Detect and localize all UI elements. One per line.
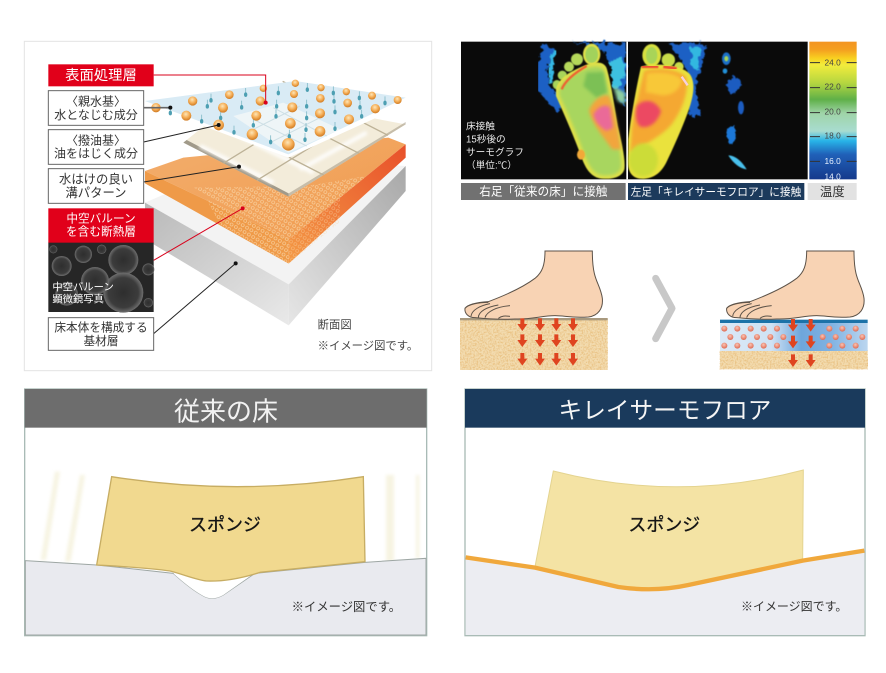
thermograph note: 15秒後の	[466, 133, 506, 145]
panel: thermograph	[461, 42, 857, 200]
header: Kirei Thermo floor	[465, 389, 865, 428]
temperature colour scale	[809, 42, 857, 181]
micrograph of hollow balloons	[48, 243, 154, 313]
label: insulation layer: 中空バルーン	[66, 212, 136, 226]
caption: left foot	[628, 183, 804, 200]
temperature colour scale: 22.0	[825, 81, 841, 91]
label: surface treatment layer	[48, 64, 154, 86]
header: conventional floor: 従来の床	[174, 396, 278, 426]
label: groove pattern	[48, 169, 144, 203]
label: insulation layer	[48, 208, 154, 243]
label: base material: 床本体を構成する	[54, 321, 148, 335]
caption: temperature	[808, 183, 857, 200]
caption: cross-section note: ※イメージ図です。	[318, 340, 418, 353]
temperature colour scale: 24.0	[825, 57, 841, 67]
label: hydrophilic group: 〈親水基〉	[66, 94, 126, 108]
panel: layered floor cross-section	[24, 41, 432, 371]
diagram: conventional floor	[460, 251, 608, 370]
sponge label: スポンジ	[189, 515, 261, 535]
image note: ※イメージ図です。	[741, 599, 847, 613]
caption: right foot: 右足「従来の床」に接触	[479, 185, 608, 199]
temperature colour scale: 14.0	[825, 171, 841, 181]
label: base material	[48, 318, 154, 350]
label: groove pattern: 溝パターン	[65, 186, 127, 200]
caption: right foot	[461, 183, 626, 200]
orange insulation layer	[466, 551, 864, 589]
caption: cross-section note	[318, 319, 418, 353]
decorative pale stripes	[41, 472, 419, 562]
base material layer	[145, 156, 406, 325]
temperature colour scale: 18.0	[825, 131, 841, 141]
micrograph of hollow balloons: 中空バルーン	[52, 280, 114, 293]
arrow: comparison chevron	[656, 278, 672, 339]
label: oil-repellent group	[48, 130, 144, 164]
label: hydrophilic group: 水となじむ成分	[54, 108, 138, 122]
label: hydrophilic group	[48, 91, 144, 125]
label: oil-repellent group: 〈撥油基〉	[66, 132, 126, 147]
header: conventional floor	[25, 389, 427, 428]
thermograph note: （単位:℃）	[466, 160, 517, 172]
label: surface treatment layer: 表面処理層	[65, 67, 137, 84]
sponge	[97, 477, 365, 581]
panel: Kirei Thermo floor sponge test	[465, 389, 865, 636]
groove pattern layer	[183, 81, 406, 197]
micrograph of hollow balloons: 顕微鏡写真	[52, 293, 104, 306]
thermograph note: 床接触	[466, 120, 495, 132]
temperature colour scale: 16.0	[825, 156, 841, 166]
label: oil-repellent group: 油をはじく成分	[54, 147, 138, 161]
caption: cross-section note: 断面図	[318, 319, 352, 332]
label: insulation layer: を含む断熱層	[66, 226, 136, 239]
surface treatment sheet	[145, 80, 406, 158]
floor surface	[466, 551, 864, 635]
panel: conventional floor sponge test	[25, 389, 427, 636]
thermal image: left foot on Kirei Thermo floor	[628, 43, 747, 179]
image note: ※イメージ図です。	[292, 600, 401, 614]
label: base material: 基材層	[84, 334, 118, 348]
insulation layer with hollow balloons	[145, 138, 406, 264]
label: groove pattern: 水はけの良い	[59, 172, 133, 187]
thermograph note: サーモグラフ	[466, 146, 524, 158]
thermograph note	[466, 120, 524, 172]
sponge	[535, 470, 803, 589]
sponge label: スポンジ	[628, 515, 700, 535]
diagram: Kirei Thermo floor	[720, 251, 868, 369]
leader lines	[144, 75, 268, 334]
floor surface with dent	[25, 558, 426, 635]
thermal image: right foot on conventional floor	[542, 43, 626, 179]
caption: left foot: 左足「キレイサーモフロア」に接触	[631, 185, 802, 198]
header: Kirei Thermo floor: キレイサーモフロア	[559, 399, 771, 425]
temperature colour scale: 20.0	[825, 107, 841, 117]
panel: heat transfer comparison	[460, 251, 868, 370]
caption: temperature: 温度	[820, 184, 845, 199]
